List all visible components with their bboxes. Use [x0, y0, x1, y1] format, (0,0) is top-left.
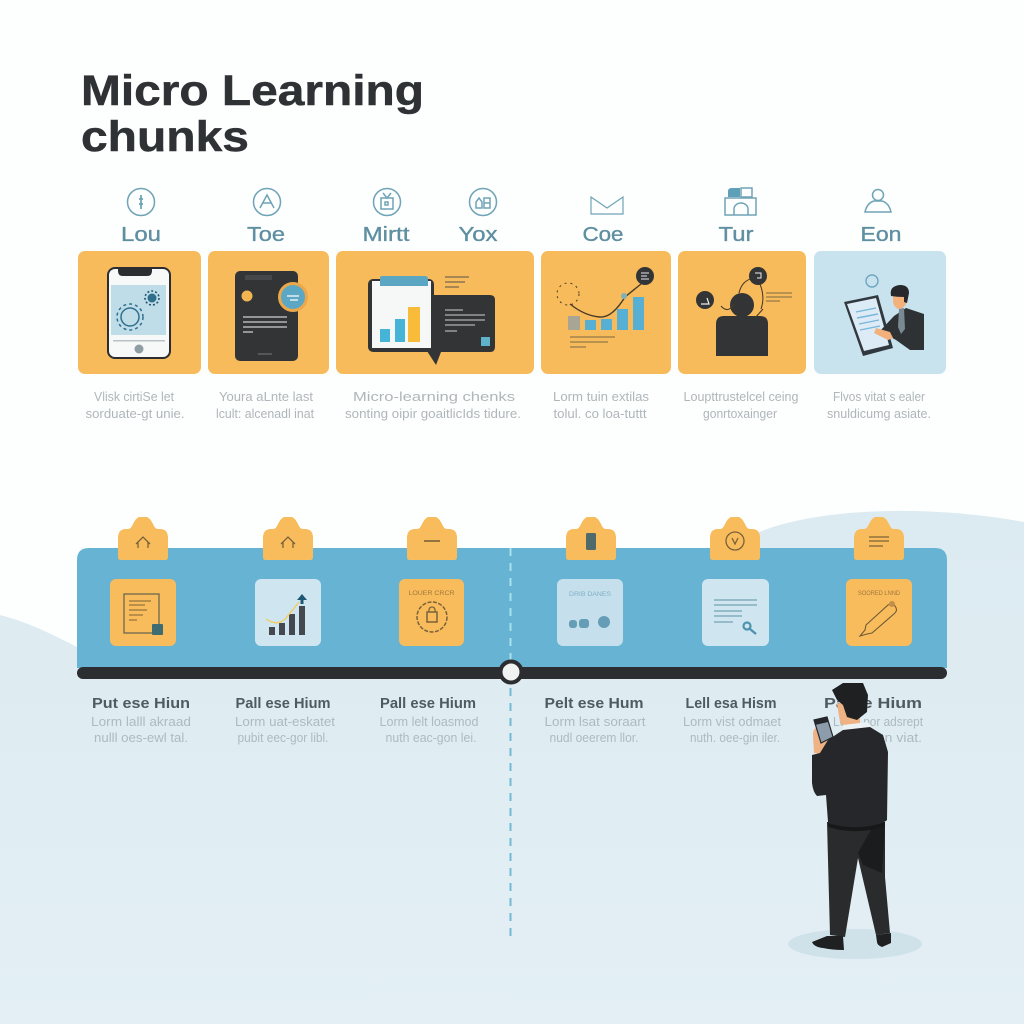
card: pale group: DRIB DANES: [569, 591, 612, 598]
illustration: businessman with phone: [788, 683, 922, 959]
timeline captions: pubit eec-gor libl.: [238, 731, 328, 745]
timeline node: [500, 662, 522, 682]
icon: group circle: [470, 188, 496, 216]
chunk descriptions: sonting oipir goaitlicIds tidure.: [345, 407, 521, 421]
timeline captions: Pall ese Hium: [380, 696, 476, 712]
timeline captions: Lorm lsat soraart: [544, 715, 646, 729]
timeline captions: nudl oeerem llor.: [550, 731, 638, 745]
chunk descriptions: gonrtoxainger: [703, 407, 777, 421]
card: rising bar chart: [255, 579, 321, 646]
chunk descriptions: Micro-learning chenks: [353, 390, 515, 404]
card: pencil: SOORED LNND: [858, 590, 900, 597]
card: text lines and magnifier: [702, 579, 769, 646]
timeline captions: Lell esa Hism: [686, 696, 776, 712]
title: chunks: [81, 113, 249, 161]
timeline captions: nulll oes-ewl tal.: [94, 731, 188, 745]
chunk descriptions: Lorm tuin extilas: [553, 390, 649, 404]
background wave: [0, 511, 1024, 1024]
dashed divider: [510, 548, 512, 936]
icon: letter A circle: [254, 188, 280, 216]
timeline captions: Pelt ese Hum: [544, 696, 644, 712]
timeline captions: Put ese Hiun: [92, 696, 190, 712]
tab glyphs: [136, 532, 889, 550]
icon: person silhouette with connections: [696, 267, 792, 356]
icon: man holding a clipboard: [844, 275, 924, 356]
panel: phone card: [78, 251, 201, 374]
icon: growth chart with curve: [557, 267, 654, 347]
timeline captions: Lorm uat-eskatet: [235, 715, 336, 729]
panel: growth curve card: [541, 251, 671, 374]
timeline captions: Parke Hium: [824, 696, 922, 712]
chunk descriptions: Vlisk cirtiSe let: [94, 390, 175, 404]
chunk labels: Toe: [247, 224, 285, 246]
timeline axis: [77, 667, 947, 679]
chunk labels: Yox: [458, 224, 498, 246]
icon: folder: [725, 188, 756, 215]
timeline captions: Lorm lalll akraad: [91, 715, 191, 729]
chunk descriptions: lcult: alcenadl inat: [216, 407, 315, 421]
panel: tablet card: [208, 251, 329, 374]
chunk descriptions: sorduate-gt unie.: [86, 407, 184, 421]
card: lock badge: [399, 579, 464, 646]
timeline captions: nuth. oee-gin iler.: [690, 731, 780, 745]
chunk labels: Tur: [718, 224, 754, 246]
panel: silhouette card: [678, 251, 806, 374]
icon: calendar circle: [374, 188, 400, 216]
timeline captions: [91, 696, 923, 745]
card: pencil: [846, 579, 912, 646]
timeline tabs: [118, 517, 904, 560]
timeline captions: Lorm por adsrept: [833, 715, 923, 729]
timeline captions: Lorm vist odmaet: [683, 715, 782, 729]
timeline blue band: [77, 548, 947, 668]
title: Micro Learning: [81, 67, 424, 115]
panel: report card: [336, 251, 534, 374]
chunk descriptions: snuldicumg asiate.: [827, 407, 931, 421]
chunk descriptions: Flvos vitat s ealer: [833, 390, 925, 404]
panel: pale reviewer card: [814, 251, 946, 374]
card: pale group: [557, 579, 623, 646]
chunk labels: [121, 224, 902, 246]
timeline panel: [77, 517, 947, 936]
chunk labels: Coe: [582, 224, 624, 246]
top row of learning chunks: [78, 188, 946, 421]
chunk labels: Lou: [121, 224, 161, 246]
timeline captions: nuth oan viat.: [838, 731, 922, 745]
chunk labels: Mirtt: [362, 224, 410, 246]
chunk descriptions: Youra aLnte last: [219, 390, 314, 404]
icon: dark tablet with badge: [235, 271, 306, 361]
icon: person outline: [865, 190, 891, 212]
chunk descriptions: [86, 390, 931, 421]
icon: bar chart document with speech bubble: [368, 276, 495, 365]
card: lock badge: LOUER CRCR: [408, 590, 455, 597]
chunk descriptions: tolul. co loa-tuttt: [554, 407, 647, 421]
chunk descriptions: Loupttrustelcel ceing: [684, 390, 799, 404]
icon: phone with gears: [108, 268, 170, 358]
card: document: [110, 579, 176, 646]
timeline captions: nuth eac-gon lei.: [386, 731, 476, 745]
title: [81, 67, 424, 161]
timeline captions: Pall ese Hium: [236, 696, 330, 712]
icon: envelope: [591, 197, 623, 214]
icon: info circle: [128, 188, 154, 216]
timeline captions: Lorm lelt loasmod: [380, 715, 479, 729]
chunk labels: Eon: [860, 224, 902, 246]
